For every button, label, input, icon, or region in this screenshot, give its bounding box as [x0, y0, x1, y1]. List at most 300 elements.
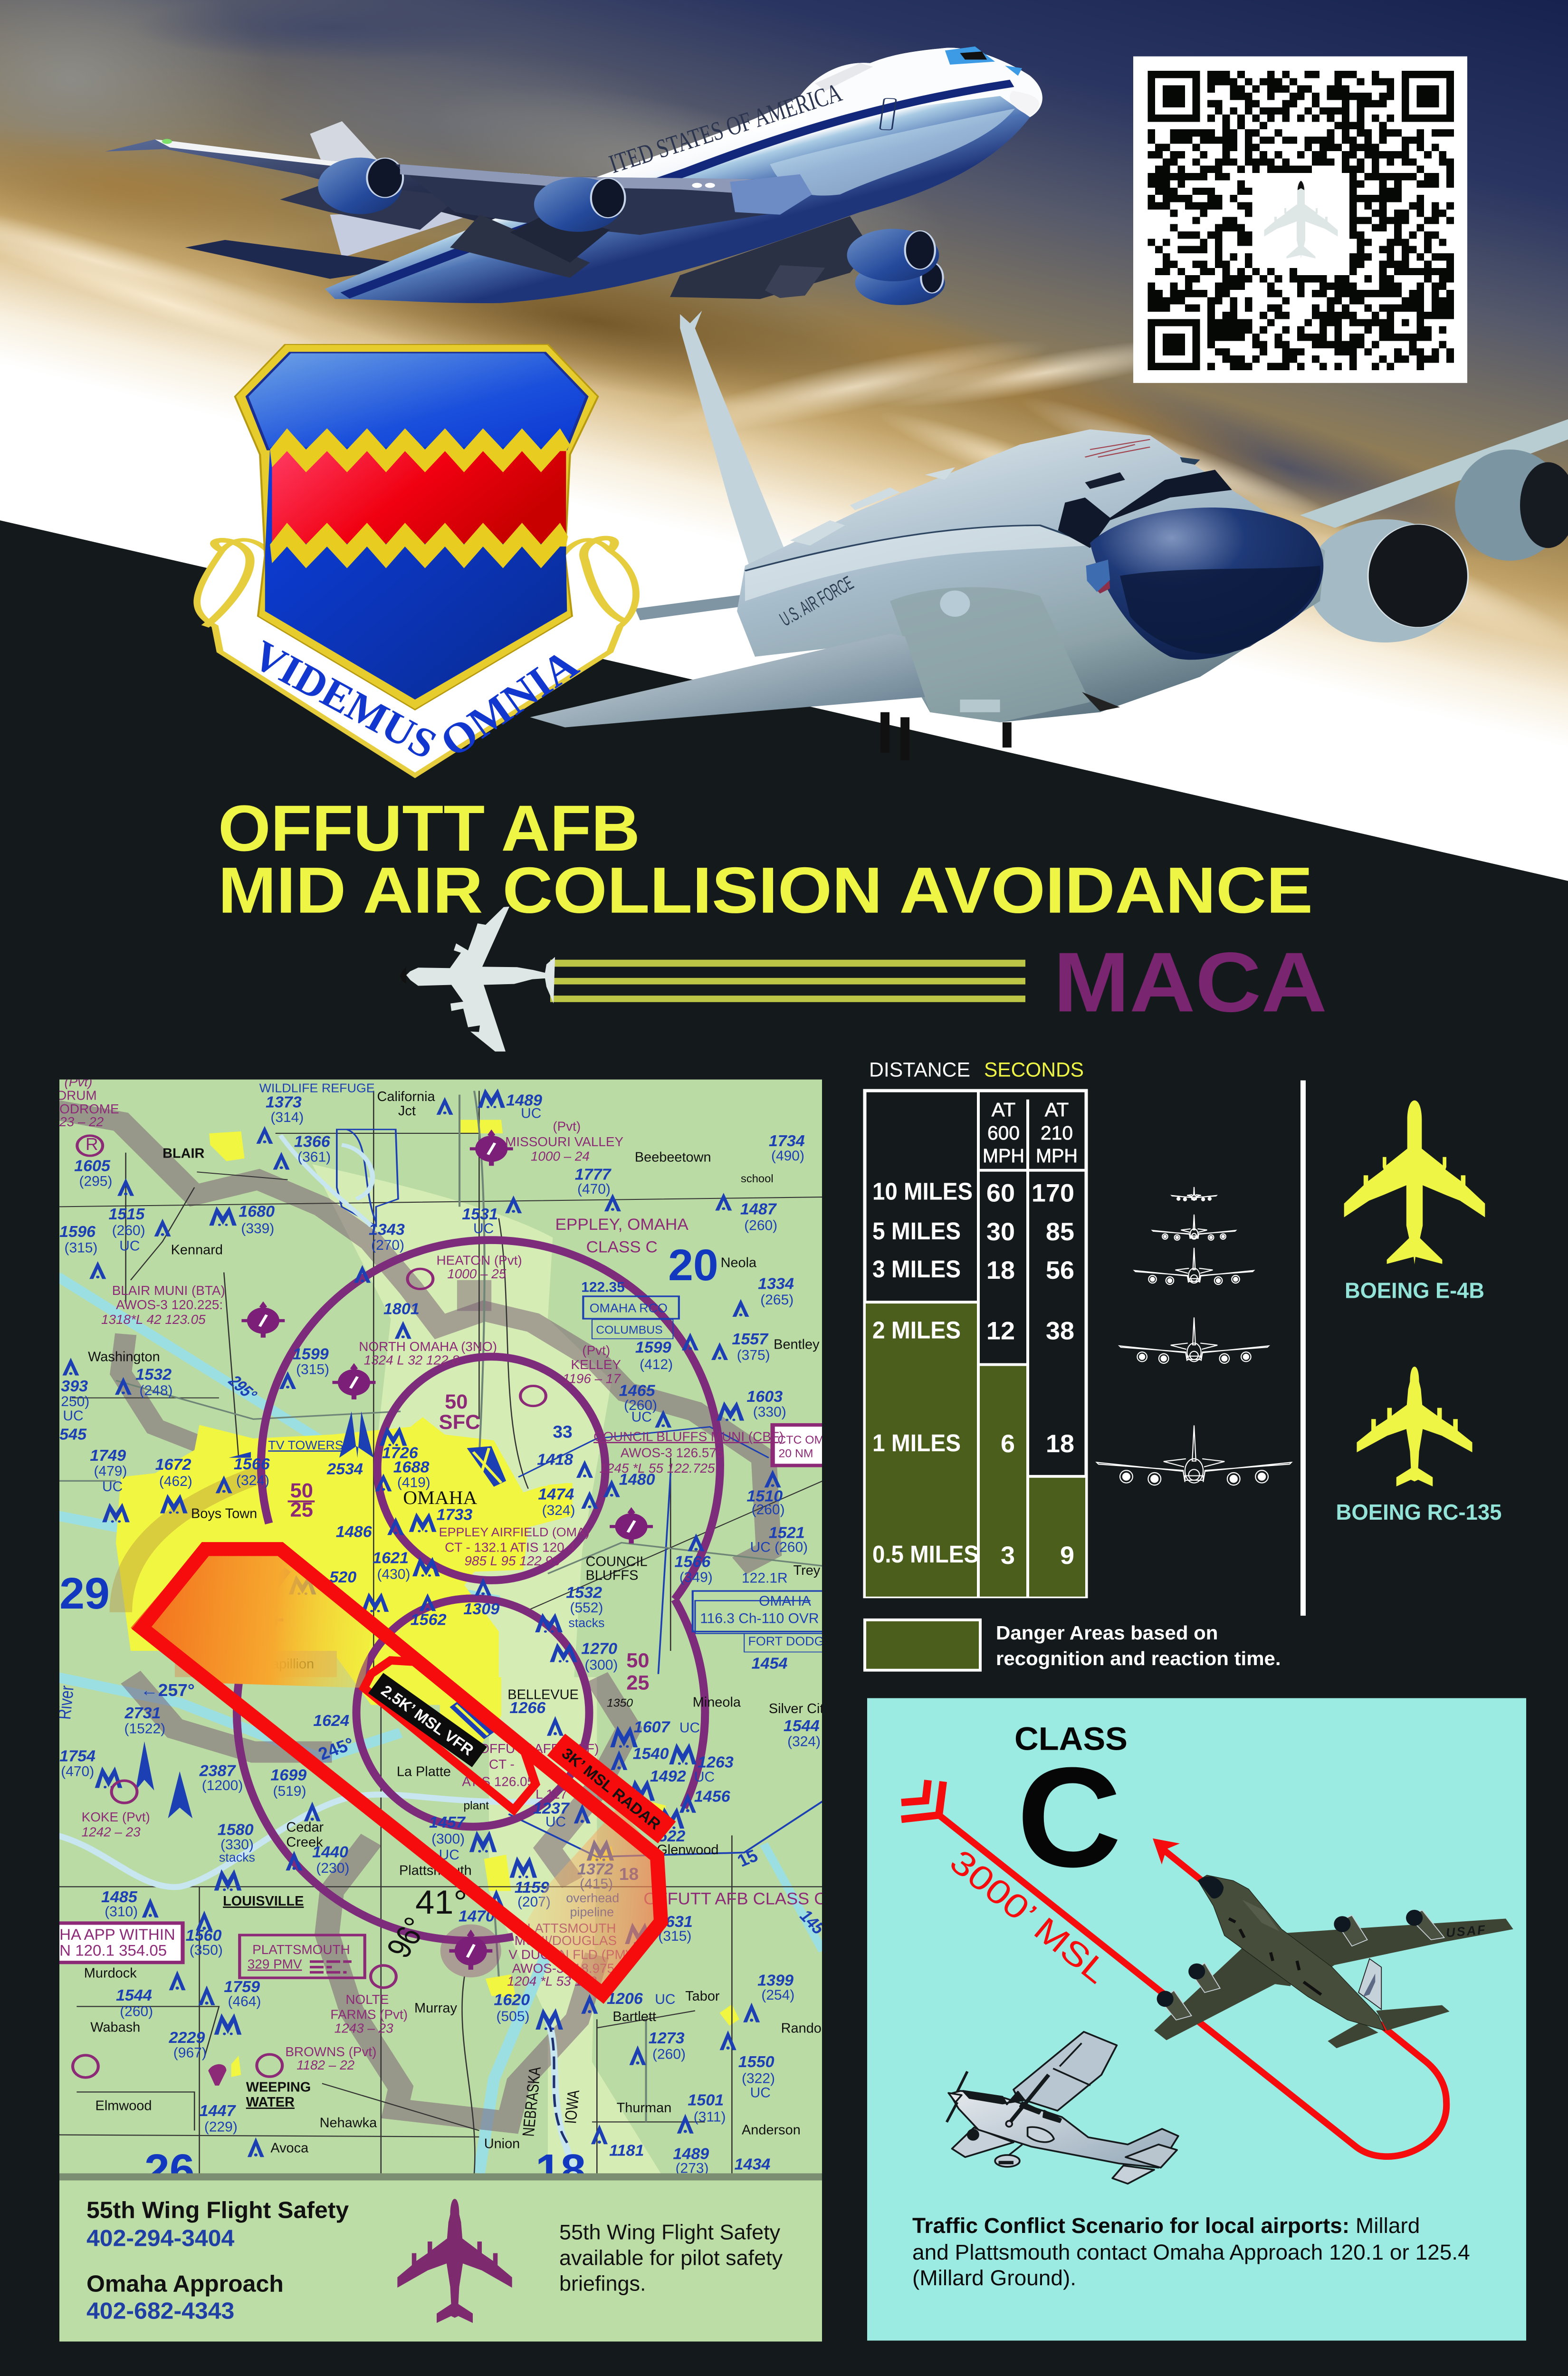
map labels north: 1000 – 24 — [531, 1149, 590, 1163]
map labels north: (314) — [270, 1110, 304, 1125]
MACA wordmark: MACA — [1053, 935, 1327, 1030]
map labels north: 1465 — [619, 1382, 656, 1400]
distance rows: 0.5 MILES — [872, 1541, 979, 1568]
map labels south: 329 PMV — [248, 1957, 302, 1971]
map labels north: 1515 — [108, 1206, 145, 1223]
map labels south: 1560 — [186, 1926, 222, 1945]
map labels south: Nehawka — [320, 2116, 377, 2130]
map labels north: 1343 — [369, 1221, 405, 1239]
map labels south: Murray — [414, 2001, 458, 2016]
tag: 3K' MSL RADAR: 3K’ MSL RADAR — [559, 1744, 664, 1833]
map labels south: (315) — [658, 1928, 691, 1944]
map labels north: 50 — [626, 1649, 650, 1672]
map labels south: Wabash — [90, 2020, 140, 2035]
map labels south: plant — [463, 1800, 489, 1812]
map labels south: L 117 — [535, 1787, 567, 1801]
map labels south: 1447 — [200, 2102, 237, 2120]
map labels south: (254) — [761, 1987, 794, 2003]
tag: 2.5K' MSL VFR: 2.5K’ MSL VFR — [378, 1682, 477, 1759]
map labels north: 985 L 95 122.95 — [464, 1553, 560, 1568]
map labels north: 1532 — [135, 1366, 172, 1383]
map labels south: overhead — [566, 1891, 619, 1905]
map labels south: UC — [750, 2085, 771, 2100]
legend: danger areas: recognition and reaction time. — [996, 1647, 1281, 1669]
map labels north: California — [377, 1089, 435, 1104]
map labels north: (260) — [624, 1398, 657, 1413]
map labels north: (339) — [241, 1221, 274, 1236]
class C airspace rings — [237, 1240, 720, 1941]
motto — [245, 632, 587, 768]
map labels south — [54, 1672, 831, 2194]
map labels south: 1754 — [59, 1747, 96, 1765]
contact: 55th Wing Flight Safety — [86, 2197, 349, 2251]
map labels south: (310) — [105, 1904, 138, 1920]
map labels north: (412) — [640, 1357, 673, 1372]
map labels north: 1531 — [462, 1206, 498, 1223]
illustration: E-4B aircraft — [105, 47, 1042, 305]
map labels north: HEATON (Pvt) — [437, 1253, 522, 1268]
map labels south: Elmwood — [96, 2098, 152, 2113]
red flight path — [901, 1780, 1446, 2156]
seconds values: 6 — [1001, 1430, 1015, 1458]
map labels south: (311) — [694, 2109, 726, 2125]
map labels south: (519) — [273, 1783, 306, 1799]
map labels north: 1562 — [411, 1611, 447, 1629]
QR code — [1133, 57, 1467, 383]
map labels north: 1486 — [336, 1523, 372, 1541]
contact: Omaha Approach — [86, 2271, 284, 2324]
map labels north: UC — [473, 1221, 494, 1236]
icon: white plane — [400, 907, 555, 1052]
map labels south: Bartlett — [612, 2009, 656, 2024]
map labels south: PLATTSMOUTH — [252, 1942, 350, 1957]
map labels south: Anderson — [742, 2123, 801, 2138]
map labels south: 2387 — [199, 1762, 237, 1780]
map labels north: 1480 — [619, 1471, 655, 1489]
map labels north: CLASS C — [586, 1238, 658, 1256]
text: traffic conflict scenario: (Millard Ground). — [912, 2266, 1076, 2290]
map labels north: 450 — [177, 1651, 204, 1669]
map labels south: (260) — [652, 2047, 686, 2062]
map labels north: (Pvt) — [64, 1074, 92, 1089]
seconds values: 56 — [1046, 1257, 1074, 1284]
map labels south: OFFUTT AFB (OFF) — [479, 1741, 599, 1756]
map labels south: UC — [545, 1814, 566, 1830]
map labels north: 1672 — [155, 1456, 191, 1474]
map labels south: 631 — [666, 1913, 693, 1931]
map labels north: (260) — [112, 1223, 145, 1238]
map labels south: (300) — [431, 1831, 465, 1847]
map labels north: (315) — [296, 1362, 329, 1377]
map labels north: BLAIR — [163, 1146, 205, 1161]
map labels north: COUNCIL BLUFFS MUNI (CBF) — [593, 1429, 784, 1444]
map labels north: (552) — [570, 1600, 603, 1616]
map labels north: EPPLEY AIRFIELD (OMA) — [439, 1525, 590, 1539]
map labels north: 1521 — [769, 1524, 805, 1542]
map labels south: BROWNS (Pvt) — [285, 2044, 376, 2059]
seconds values: 3 — [1001, 1542, 1015, 1570]
map labels south: 1550 — [738, 2053, 774, 2071]
map labels south: 2731 — [124, 1704, 161, 1722]
map labels north: (300) — [584, 1657, 618, 1673]
seconds values: 38 — [1046, 1317, 1074, 1345]
map labels south: IOWA — [561, 2089, 583, 2124]
map labels north: 1603 — [746, 1388, 783, 1406]
map labels south: 25 — [626, 1672, 650, 1694]
table headings: SECONDS — [984, 1059, 1084, 1082]
map labels north: school — [741, 1172, 774, 1185]
map labels north: EPPLEY, OMAHA — [555, 1216, 689, 1234]
map labels south: 1470 — [459, 1907, 495, 1925]
seconds values: 18 — [1046, 1430, 1074, 1458]
map labels south: (470) — [61, 1764, 94, 1779]
map labels north: 1270 — [581, 1640, 617, 1658]
map labels south: V DUGAN FLD (PMV) — [508, 1947, 639, 1962]
map labels south: (330) — [220, 1837, 254, 1852]
map labels south: La Platte — [397, 1764, 451, 1779]
map labels south: Silver City — [769, 1701, 831, 1716]
map labels north: 1000 – 25 — [447, 1266, 507, 1281]
map labels south: 1456 — [694, 1788, 730, 1805]
map labels south: Tabor — [685, 1989, 720, 2004]
table headings — [869, 1059, 1084, 1082]
panel: contacts caption — [59, 2174, 822, 2341]
map labels north: 1489 — [506, 1092, 542, 1109]
map labels south: Murdock — [84, 1966, 137, 1981]
map labels south: (273) — [676, 2161, 709, 2176]
map labels south: 1204 *L 53 122 — [507, 1974, 597, 1988]
map labels north: 1454 — [752, 1655, 788, 1672]
map labels south: Glenwood — [657, 1842, 719, 1858]
map labels north: 1318*L 42 123.05 — [101, 1312, 206, 1327]
map labels north: UC — [631, 1409, 652, 1425]
seconds values: 18 — [986, 1257, 1015, 1284]
map labels north: (330) — [753, 1404, 786, 1420]
illustration: RC-135 aircraft — [530, 311, 1568, 760]
map labels south: 1620 — [494, 1991, 530, 2009]
map labels south: AWOS-3 118.975 — [512, 1961, 614, 1975]
seconds values — [986, 1179, 1074, 1570]
map labels south: 1159 — [515, 1878, 549, 1897]
map labels south: MUNI/DOUGLAS — [515, 1933, 617, 1948]
divider — [1300, 1081, 1306, 1616]
text: briefing note: briefings. — [559, 2272, 646, 2295]
map labels south: 1544 — [784, 1717, 820, 1735]
title: MID AIR COLLISION AVOIDANCE — [218, 854, 1313, 927]
map labels north: (295) — [79, 1174, 112, 1189]
contact: 55th Wing Flight Safety: 55th Wing Flight Safety — [86, 2197, 349, 2223]
seconds values: 85 — [1046, 1218, 1074, 1246]
column heads: MPH — [1036, 1144, 1078, 1167]
map labels south: (322) — [742, 2071, 775, 2087]
map labels north: UC — [102, 1479, 123, 1495]
map labels south: stacks — [219, 1850, 255, 1864]
title — [218, 792, 1313, 927]
map labels south: LOUISVILLE — [223, 1894, 304, 1909]
distance rows: 10 MILES — [872, 1178, 973, 1205]
map labels south: Rando — [781, 2021, 822, 2036]
map labels north: (430) — [377, 1567, 410, 1582]
map labels north: 50 — [445, 1390, 468, 1413]
seconds values: 170 — [1032, 1179, 1074, 1207]
map labels south: 1607 — [634, 1718, 671, 1736]
seconds values: 30 — [986, 1218, 1015, 1246]
map labels north: (324) — [542, 1503, 575, 1518]
map labels south: (505) — [497, 2009, 529, 2024]
map labels north: 1688 — [393, 1458, 430, 1476]
map labels north: 1245 *L 55 122.725 — [599, 1461, 715, 1475]
map labels north: Beebeetown — [635, 1150, 711, 1165]
map labels north: NORTH OMAHA (3NO) — [359, 1339, 497, 1354]
map labels north: SFC — [439, 1411, 480, 1434]
column heads: 600 — [987, 1121, 1020, 1144]
map labels south: N 120.1 354.05 — [59, 1942, 167, 1959]
map labels north: 1373 — [266, 1093, 302, 1111]
map labels south: 41° — [415, 1884, 467, 1921]
icon: Cessna — [947, 2032, 1178, 2184]
distance rows: 2 MILES — [872, 1316, 961, 1344]
map labels south: 2229 — [169, 2029, 205, 2047]
map labels south: UC — [679, 1720, 700, 1736]
heading: CLASS: CLASS — [1014, 1720, 1128, 1757]
map labels south: Union — [484, 2136, 520, 2151]
map labels north: (Pvt) — [582, 1343, 610, 1358]
contact: 55th Wing Flight Safety: 402-294-3404 — [86, 2225, 235, 2251]
map labels north: OMAHA — [403, 1487, 478, 1508]
table headings: DISTANCE — [869, 1059, 970, 1082]
motto: VIDEMUS — [245, 632, 444, 768]
map labels north: FORT DODGE — [748, 1634, 832, 1648]
map labels south: ATIS 126.05 — [462, 1774, 535, 1789]
map labels north: 50 — [290, 1479, 313, 1502]
aircraft ID: Boeing E-4B — [1344, 1101, 1485, 1303]
map labels south: (1522) — [124, 1721, 165, 1736]
map labels north: AWOS-3 120.225: — [116, 1297, 223, 1312]
map labels south: (967) — [173, 2045, 207, 2061]
map labels north: 1566 — [234, 1455, 270, 1473]
map labels north: 1487 — [740, 1200, 777, 1218]
map labels north: 23 – 22 — [59, 1114, 104, 1129]
map labels south: 1237 — [533, 1800, 570, 1817]
map labels south: 1580 — [218, 1821, 254, 1839]
panel: class C traffic scenario — [867, 1698, 1526, 2340]
lettering: USAF: USAF — [1445, 1922, 1487, 1940]
map labels north: WILDLIFE REFUGE — [259, 1081, 375, 1095]
map labels north: 2534 — [326, 1460, 363, 1478]
map labels north: 1474 — [538, 1485, 574, 1503]
map labels north: (361) — [297, 1150, 331, 1165]
text: traffic conflict scenario: and Plattsmouth contact Omaha Approach 120.1 or 125.4 — [912, 2240, 1470, 2264]
map labels north: 1366 — [294, 1133, 330, 1150]
map labels south: OFFUTT AFB CLASS C — [643, 1889, 826, 1908]
map labels north: 1334 — [758, 1275, 794, 1293]
map labels south: 1489 — [673, 2145, 709, 2163]
map labels north: 122.35 — [581, 1280, 625, 1295]
column heads — [983, 1098, 1078, 1167]
aircraft ID: Boeing RC-135 — [1336, 1367, 1501, 1524]
map labels north: 1418 — [537, 1451, 573, 1468]
map labels south: Creek — [286, 1835, 323, 1850]
map labels south: 1501 — [688, 2091, 724, 2109]
map labels north: 122.1R — [742, 1571, 788, 1586]
map labels south: WATER — [246, 2095, 295, 2110]
seconds values: 60 — [986, 1179, 1015, 1207]
map labels north: (479) — [94, 1464, 127, 1479]
map labels north: (260) — [744, 1218, 777, 1233]
map labels south: (260) — [120, 2004, 153, 2019]
map labels north: 1749 — [90, 1447, 126, 1465]
map labels south: 1242 – 23 — [82, 1825, 141, 1839]
map labels north: Boys Town — [191, 1506, 257, 1522]
column heads: AT — [992, 1098, 1015, 1121]
map labels north: (490) — [771, 1148, 804, 1164]
map labels south: (230) — [316, 1860, 349, 1876]
map labels north: Neola — [721, 1255, 756, 1270]
map labels south: River — [54, 1685, 78, 1720]
map labels north: 20 NM — [779, 1447, 813, 1460]
map labels north: DRUM — [57, 1088, 97, 1103]
legend: danger areas: Danger Areas based on — [996, 1621, 1218, 1644]
map labels north: (260) — [752, 1502, 785, 1517]
seconds values: 9 — [1060, 1542, 1074, 1570]
map labels north: Kennard — [171, 1243, 223, 1258]
map labels north: COUNCIL — [586, 1554, 648, 1569]
text: briefing note: available for pilot safety — [559, 2247, 783, 2270]
map labels north: Jct — [398, 1103, 416, 1119]
motto: OMNIA — [431, 640, 587, 766]
column heads: MPH — [983, 1144, 1024, 1167]
map shapes north — [57, 1091, 822, 1705]
map labels north: CT - 132.1 ATIS 120.4 — [445, 1540, 575, 1555]
icon: plane in QR centre — [1264, 181, 1338, 259]
map labels south: BELLEVUE — [507, 1687, 579, 1702]
map labels north: 1605 — [74, 1157, 111, 1175]
map labels north: BLUFFS — [586, 1568, 638, 1583]
map labels north: R — [86, 1134, 98, 1154]
map labels north: UC (260) — [750, 1540, 808, 1555]
map labels south: 1372 — [577, 1860, 613, 1878]
map labels south: 1181 — [609, 2142, 644, 2159]
distance rows: 1 MILES — [872, 1429, 961, 1456]
map labels south: FARMS (Pvt) — [330, 2007, 408, 2022]
map labels south: 1182 – 22 — [296, 2058, 354, 2072]
aircraft lettering: UNITED STATES OF AMERICA: ITED STATES OF AMERICA — [606, 78, 845, 179]
map labels south: UC — [694, 1769, 715, 1785]
map labels south: WEEPING — [246, 2080, 311, 2095]
legend: danger areas — [865, 1620, 1281, 1670]
map labels south: 1243 – 23 — [335, 2021, 393, 2035]
map shapes south — [57, 1677, 822, 2173]
map labels north: (324) — [236, 1473, 269, 1488]
map labels south: 1263 — [698, 1753, 734, 1771]
map labels north: (375) — [737, 1348, 770, 1363]
map labels south: 1544 — [116, 1986, 152, 2004]
map labels north: (248) — [140, 1383, 172, 1399]
contact: Omaha Approach: Omaha Approach — [86, 2271, 284, 2297]
map labels north: AWOS-3 126.575 — [621, 1446, 724, 1460]
map labels north: 1726 — [382, 1444, 418, 1462]
column heads: AT — [1045, 1098, 1069, 1121]
table: distance and seconds — [865, 1091, 1086, 1598]
map labels north: 1532 — [566, 1584, 602, 1602]
map labels north: (270) — [371, 1237, 404, 1253]
sky with clouds — [0, 0, 1568, 885]
map labels north: BLAIR MUNI (BTA) — [112, 1283, 225, 1298]
map labels south: 18 — [535, 2145, 586, 2194]
panel: sectional map — [54, 1074, 849, 2194]
map labels north: UC — [119, 1238, 140, 1254]
map labels south: 1266 — [509, 1699, 545, 1717]
aircraft ID: Boeing RC-135: BOEING RC-135 — [1336, 1500, 1502, 1524]
big letter C: C — [1017, 1738, 1121, 1897]
map labels south: KOKE (Pvt) — [82, 1810, 150, 1824]
contrail bars — [550, 960, 1025, 1002]
map labels south: (207) — [517, 1894, 551, 1910]
map labels north: 1621 — [373, 1549, 409, 1567]
map labels north: 1734 — [769, 1132, 805, 1150]
map labels north: OMAHA — [759, 1593, 811, 1609]
distance rows: 3 MILES — [872, 1255, 961, 1283]
map labels north: COLUMBUS — [596, 1324, 663, 1336]
map labels north: 1801 — [383, 1300, 420, 1318]
map labels south: Plattsmouth — [399, 1863, 472, 1878]
map labels south: PLATTSMOUTH — [518, 1921, 616, 1935]
title: OFFUTT AFB — [218, 792, 640, 865]
map labels south: 1399 — [757, 1972, 794, 1989]
map labels south: 1485 — [101, 1888, 138, 1906]
map labels south: pipeline — [570, 1905, 614, 1919]
map labels south: Cedar — [286, 1820, 324, 1835]
map labels north: UC — [521, 1106, 541, 1121]
map labels north: 520 — [329, 1569, 356, 1586]
map labels north: OMAHA RCO — [590, 1301, 668, 1315]
icon: purple plane — [397, 2199, 512, 2323]
black diagonal corner over the sky edge — [0, 520, 1568, 932]
map labels south: 1759 — [224, 1978, 260, 1996]
map labels north: 25 — [290, 1499, 313, 1522]
map labels north: CTC OMAHA — [777, 1434, 849, 1447]
map labels north: 116.3 Ch-110 OVR — [700, 1611, 819, 1627]
text: briefing note — [559, 2221, 783, 2295]
tag: 3K' MSL RADAR — [547, 1734, 676, 1843]
map labels north: Papillion — [262, 1657, 314, 1672]
map labels north: 1324 L 32 122.8 — [364, 1353, 459, 1367]
map labels north: 1596 — [59, 1223, 96, 1241]
tag: 2.5K' MSL VFR — [368, 1673, 487, 1767]
map labels north: (349) — [679, 1570, 713, 1585]
map labels north: stacks — [568, 1616, 604, 1630]
map labels south: (415) — [580, 1876, 613, 1892]
map labels south: CT - — [489, 1757, 515, 1772]
map labels north: 1196 – 17 — [563, 1371, 621, 1386]
map labels south: ←257° — [141, 1680, 195, 1700]
map labels south: NEBRASKA — [519, 2066, 545, 2137]
airspace overlay: red boundary — [131, 1544, 676, 2002]
map labels south: 15 — [734, 1846, 761, 1870]
map labels south: (1200) — [202, 1778, 243, 1793]
distance rows — [872, 1178, 979, 1568]
map labels south: 1699 — [270, 1766, 306, 1784]
map labels north: 1777 — [575, 1166, 612, 1183]
column heads: 210 — [1041, 1121, 1073, 1144]
map labels south: (229) — [204, 2119, 238, 2135]
map labels north: KELLEY — [571, 1357, 621, 1372]
map labels north: (315) — [64, 1240, 97, 1255]
map labels south: Mineola — [693, 1695, 741, 1710]
map labels south: UC — [655, 1992, 675, 2007]
map labels south: NOLTE — [345, 1993, 389, 2007]
text: traffic conflict scenario — [912, 2213, 1470, 2290]
